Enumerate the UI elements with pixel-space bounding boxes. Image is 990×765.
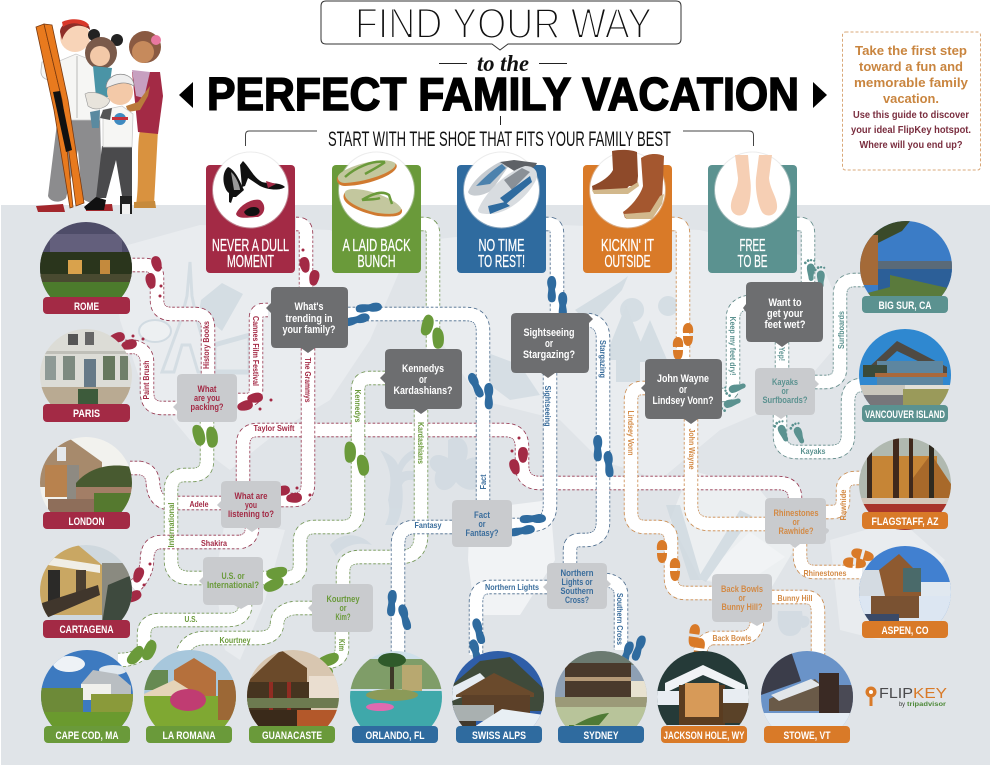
question: back bowls or bunny hill: or [738, 593, 746, 604]
icon: binoculars [620, 296, 678, 322]
label: sydney: SYDNEY [584, 730, 619, 742]
path labels: red: Taylor Swift [254, 423, 295, 433]
label: flagstaff [862, 512, 948, 529]
question: what are you packing: are you [194, 393, 220, 404]
path labels: blue: Stargazing [598, 340, 608, 378]
subtitle: START WITH THE SHOE THAT FITS YOUR FAMILY BEST [328, 128, 671, 151]
icon: hibiscus [430, 437, 488, 490]
photo: jackson hole [657, 651, 749, 726]
question: kennedys or kardashians: Kardashians? [394, 385, 453, 397]
photo: orlando [350, 651, 442, 726]
path labels: red: History Books [201, 321, 211, 369]
question: john wayne or lindsey vonn: Lindsey Vonn? [652, 395, 714, 407]
label: la romana: LA ROMANA [162, 730, 216, 742]
question: what are you listening to: What are [234, 491, 268, 502]
callout: take the first step: Take the first step [855, 43, 967, 58]
label: sydney [558, 726, 644, 743]
question: kayaks or surfboards [755, 368, 819, 419]
label: big sur: BIG SUR, CA [878, 300, 932, 312]
icon: flip flops [337, 160, 402, 216]
question: want to get your feet wet: feet wet? [764, 319, 806, 331]
callout: take the first step [842, 32, 980, 170]
question: kennedys or kardashians [380, 349, 462, 414]
callout: take the first step: toward a fun and [859, 59, 963, 74]
label: paris [43, 404, 130, 422]
path: northern lights [476, 587, 547, 655]
question: sightseeing or stargazing: or [545, 338, 554, 350]
icon: palette [139, 320, 171, 342]
label: jackson hole [661, 726, 747, 743]
path: never a dull to trending [296, 224, 306, 287]
path: kim [325, 632, 342, 662]
path: cape cod [118, 604, 245, 660]
logo: flipkey: by [899, 702, 905, 708]
question: fact or fantasy: Fact [474, 510, 491, 521]
question: rhinestones or rawhide [765, 498, 829, 548]
photo: rome [40, 222, 132, 297]
logo: flipkey: FLIP [879, 685, 913, 702]
question: what's trending [266, 287, 348, 353]
photo: london [40, 437, 132, 512]
question: kayaks or surfboards: or [782, 386, 789, 397]
question: kayaks or surfboards: Surfboards? [762, 395, 808, 406]
path labels: teal: Kayaks [800, 446, 826, 456]
photo: swiss alps [452, 651, 544, 726]
father [36, 19, 113, 212]
question: what are you packing: packing? [190, 402, 224, 413]
question: john wayne or lindsey vonn: John Wayne [657, 373, 709, 385]
path: trending to fact [348, 314, 483, 500]
question: sightseeing or stargazing: Stargazing? [523, 349, 575, 361]
photo: flagstaff [859, 438, 951, 530]
shoe box: no time to rest [457, 152, 546, 273]
label: swiss alps: SWISS ALPS [472, 730, 526, 742]
question: rhinestones or rawhide: Rawhide? [778, 526, 814, 537]
arrow right [813, 82, 827, 108]
label: rome [43, 297, 130, 314]
icon: mug [778, 611, 810, 636]
question: northern lights or southern cross: Northern [560, 568, 594, 579]
arrow left [179, 82, 193, 108]
question: want to get your feet wet [743, 282, 823, 347]
title: find your way: FIND YOUR WAY [355, 0, 652, 48]
question: northern lights or southern cross: Lights or [562, 577, 593, 588]
question: kourtney or kim [308, 584, 373, 632]
question: kourtney or kim: or [340, 603, 347, 614]
world map [110, 225, 945, 660]
path: rhinestones [800, 544, 862, 572]
icon: bare feet [731, 155, 777, 215]
path labels: red: Cannes Film Festival [251, 316, 261, 386]
question: us or international: International? [207, 580, 259, 591]
bracket left [246, 131, 317, 146]
question: what are you listening to: you [245, 500, 257, 511]
label: flagstaff: FLAGSTAFF, AZ [872, 516, 939, 528]
label: aspen [862, 621, 948, 638]
path: cannes film festival [238, 310, 268, 400]
question: kourtney or kim: Kim? [336, 612, 351, 623]
question: rhinestones or rawhide: Rhinestones [774, 508, 818, 519]
path: surfboards [815, 280, 865, 382]
footprints: blue [343, 276, 647, 668]
question: what's trending: trending in [286, 313, 333, 325]
label: cape cod [44, 726, 130, 743]
path labels: green [166, 390, 426, 651]
shoe box: no time to rest: TO REST! [478, 251, 525, 271]
label: paris: PARIS [73, 408, 100, 420]
shoe box: kickin it outside [583, 150, 672, 273]
path: the grammys [281, 348, 308, 500]
path labels: teal: Yep! [777, 347, 787, 361]
path: kennedys [263, 378, 385, 578]
question: sightseeing or stargazing [511, 313, 593, 378]
question: john wayne or lindsey vonn: or [679, 384, 688, 396]
label: london: LONDON [68, 516, 105, 528]
label: big sur [862, 296, 948, 313]
path labels: orange: Bunny Hill [778, 593, 812, 603]
path: rawhide [826, 478, 862, 512]
question: northern lights or southern cross [543, 563, 611, 609]
shoe box: kickin it outside: KICKIN' IT [601, 235, 654, 255]
label: orlando [352, 726, 438, 743]
label: vancouver island [862, 405, 948, 422]
icon: sneakers [468, 160, 537, 214]
photo: vancouver island [859, 329, 951, 405]
path labels: green: Kennedys [353, 390, 363, 423]
path: bunny hill [772, 597, 818, 655]
shoe box: a laid back bunch [332, 152, 421, 273]
path: no time to sightseeing [546, 224, 557, 313]
path: paris to paint brush [125, 347, 177, 408]
icon: pine trees [604, 305, 668, 382]
question: what are you listening to: listening to? [228, 509, 274, 520]
label: cartagena [43, 620, 130, 638]
tick under title [500, 116, 501, 125]
path labels: blue: Fact [478, 474, 488, 490]
path labels: orange: Rhinestones [804, 568, 847, 578]
question: northern lights or southern cross: Southern [560, 586, 594, 597]
path: rome to history books [128, 265, 208, 375]
background band [1, 205, 990, 765]
question: what's trending: your family? [282, 324, 336, 336]
path: laid back to kennedys [421, 224, 433, 349]
shoe box: a laid back bunch: A LAID BACK [342, 235, 411, 255]
path labels: red: The Grammys [303, 358, 313, 403]
logo: flipkey: KEY [913, 685, 947, 702]
photo: paris [40, 329, 132, 404]
shoe box: free to be: FREE [740, 235, 766, 255]
question: rhinestones or rawhide: or [792, 517, 800, 528]
path labels: red: Shakira [201, 538, 227, 548]
callout: take the first step: your ideal FlipKey hotspot. [851, 125, 971, 136]
path labels: green: Kim [337, 639, 347, 651]
path: international [171, 421, 207, 578]
shoe box: kickin it outside: OUTSIDE [604, 251, 650, 271]
shoe box: never a dull moment [206, 152, 295, 273]
photo: guanacaste [247, 650, 339, 726]
path: keep my feet dry [722, 302, 748, 395]
path: yep [775, 342, 789, 368]
shoe box: free to be [708, 152, 797, 273]
shoe box: free to be: TO BE [738, 251, 768, 271]
question: kennedys or kardashians: Kennedys [402, 363, 444, 375]
label: stowe: STOWE, VT [784, 730, 831, 742]
skis [36, 24, 84, 208]
path labels: orange: Back Bowls [712, 633, 752, 643]
icon: tent [699, 532, 785, 580]
path: london to adele [130, 468, 221, 503]
illustration: family [36, 19, 163, 214]
callout: take the first step: memorable family [854, 75, 969, 90]
shoe box: no time to rest: NO TIME [478, 235, 524, 255]
path: kardashians [343, 410, 421, 585]
path labels: blue: Southern Cross [615, 593, 625, 645]
decorative icons [139, 262, 810, 636]
photo: aspen [859, 546, 951, 621]
question: what are you listening to [217, 481, 281, 532]
path: taylor swift [243, 430, 795, 498]
path labels: blue [414, 340, 625, 645]
path: kickin it to john wayne [672, 224, 683, 359]
boy [84, 74, 134, 214]
question: us or international: U.S. or [222, 571, 245, 582]
question: john wayne or lindsey vonn [641, 359, 722, 424]
title: perfect family vacation: PERFECT FAMILY VACATION [207, 68, 799, 120]
path labels: green: International [166, 502, 176, 548]
question: fact or fantasy: or [478, 519, 486, 530]
icon: dolphin [330, 535, 372, 556]
callout: take the first step: Use this guide to discover [853, 110, 969, 121]
path labels: orange [626, 410, 848, 643]
question: kennedys or kardashians: or [419, 374, 428, 386]
photo: sydney [555, 651, 647, 726]
photo: cartagena [40, 545, 132, 620]
path labels: teal: Surfboards [836, 311, 846, 349]
icon: rocket [575, 276, 628, 325]
path: back bowls [700, 622, 757, 652]
path labels: green: Kardashians [416, 422, 426, 464]
path labels: green: Kourtney [220, 635, 251, 645]
label: rome: ROME [74, 301, 99, 313]
path labels: orange: Lindsey Vonn [626, 410, 636, 456]
path: lindsey vonn [631, 388, 712, 593]
label: london [43, 512, 130, 529]
photo: big sur [860, 221, 952, 296]
path labels: red [141, 316, 313, 548]
icon: boots [592, 150, 664, 219]
question: back bowls or bunny hill: Bunny Hill? [722, 602, 763, 613]
question: want to get your feet wet: get your [767, 308, 804, 320]
label: cartagena: CARTAGENA [60, 624, 114, 636]
photo: stowe [761, 651, 853, 726]
photo: cape cod [41, 650, 133, 726]
label: swiss alps [456, 726, 542, 743]
question: what are you packing [173, 374, 237, 422]
question: back bowls or bunny hill: Back Bowls [721, 584, 763, 595]
path labels: blue: Sightseeing [543, 386, 553, 426]
label: guanacaste: GUANACASTE [262, 730, 322, 742]
label: aspen: ASPEN, CO [882, 625, 929, 637]
path labels: teal [728, 311, 846, 456]
path: sightseeing [512, 373, 550, 525]
question: northern lights or southern cross: Cross? [565, 595, 589, 606]
path labels: orange: Rawhide [838, 489, 848, 520]
question: kayaks or surfboards: Kayaks [772, 377, 798, 388]
path: cartagena to shakira [133, 528, 252, 588]
question: what's trending: What's [294, 301, 324, 313]
bracket right [683, 131, 754, 146]
question: sightseeing or stargazing: Sightseeing [524, 327, 574, 339]
path: free to be [797, 224, 808, 282]
label: la romana [146, 726, 232, 743]
shoe box: a laid back bunch: BUNCH [358, 251, 396, 271]
path labels: blue: Fantasy [414, 520, 442, 530]
logo: flipkey: tripadvisor [907, 701, 947, 708]
icon: skis [666, 505, 752, 582]
shoe box: never a dull moment: MOMENT [227, 251, 274, 271]
label: guanacaste [249, 726, 335, 743]
title: to the [439, 51, 567, 76]
icon: palm tree [380, 449, 428, 525]
footprints: orange [657, 323, 875, 662]
path: john wayne [691, 419, 766, 524]
label: jackson hole: JACKSON HOLE, WY [664, 730, 745, 742]
path: kourtney [183, 608, 312, 652]
path labels: orange: John Wayne [687, 428, 697, 470]
girl [85, 29, 123, 128]
path labels: red: Paint Brush [141, 360, 151, 400]
callout: take the first step: Where will you end up? [860, 140, 962, 151]
icon: high heels [223, 161, 285, 218]
question: us or international [199, 557, 263, 609]
path: southern cross [606, 580, 621, 650]
question: fact or fantasy: Fantasy? [466, 528, 499, 539]
question: kourtney or kim: Kourtney [326, 594, 360, 605]
icon: british flag [214, 335, 250, 372]
shoe box: never a dull moment: NEVER A DULL [212, 235, 289, 255]
title: to the: to the [477, 51, 529, 76]
footprints: teal [718, 259, 827, 446]
path labels: green: U.S. [184, 614, 198, 624]
path: fantasy [398, 527, 452, 655]
label: vancouver island: VANCOUVER ISLAND [865, 409, 945, 421]
question: back bowls or bunny hill [712, 574, 772, 626]
mother [126, 31, 163, 208]
path: stargazing [570, 320, 603, 563]
path labels: blue: Northern Lights [485, 582, 539, 592]
label: stowe [764, 726, 850, 743]
footprints: red [108, 248, 528, 605]
callout: take the first step: vacation. [883, 91, 939, 106]
label: orlando: ORLANDO, FL [366, 730, 425, 742]
question: what are you packing: What [198, 384, 217, 395]
question: fact or fantasy [452, 500, 512, 547]
label: cape cod: CAPE COD, MA [56, 730, 119, 742]
path labels: red: Adele [190, 499, 209, 509]
icon: eiffel tower [162, 262, 212, 372]
icon: book [199, 283, 243, 331]
path: kayaks [780, 385, 862, 452]
question: want to get your feet wet: Want to [768, 297, 802, 309]
photo: la romana [144, 650, 236, 726]
path labels: teal: Keep my feet dry! [728, 316, 738, 376]
logo: flipkey [866, 685, 947, 708]
footprints: green [124, 313, 444, 687]
